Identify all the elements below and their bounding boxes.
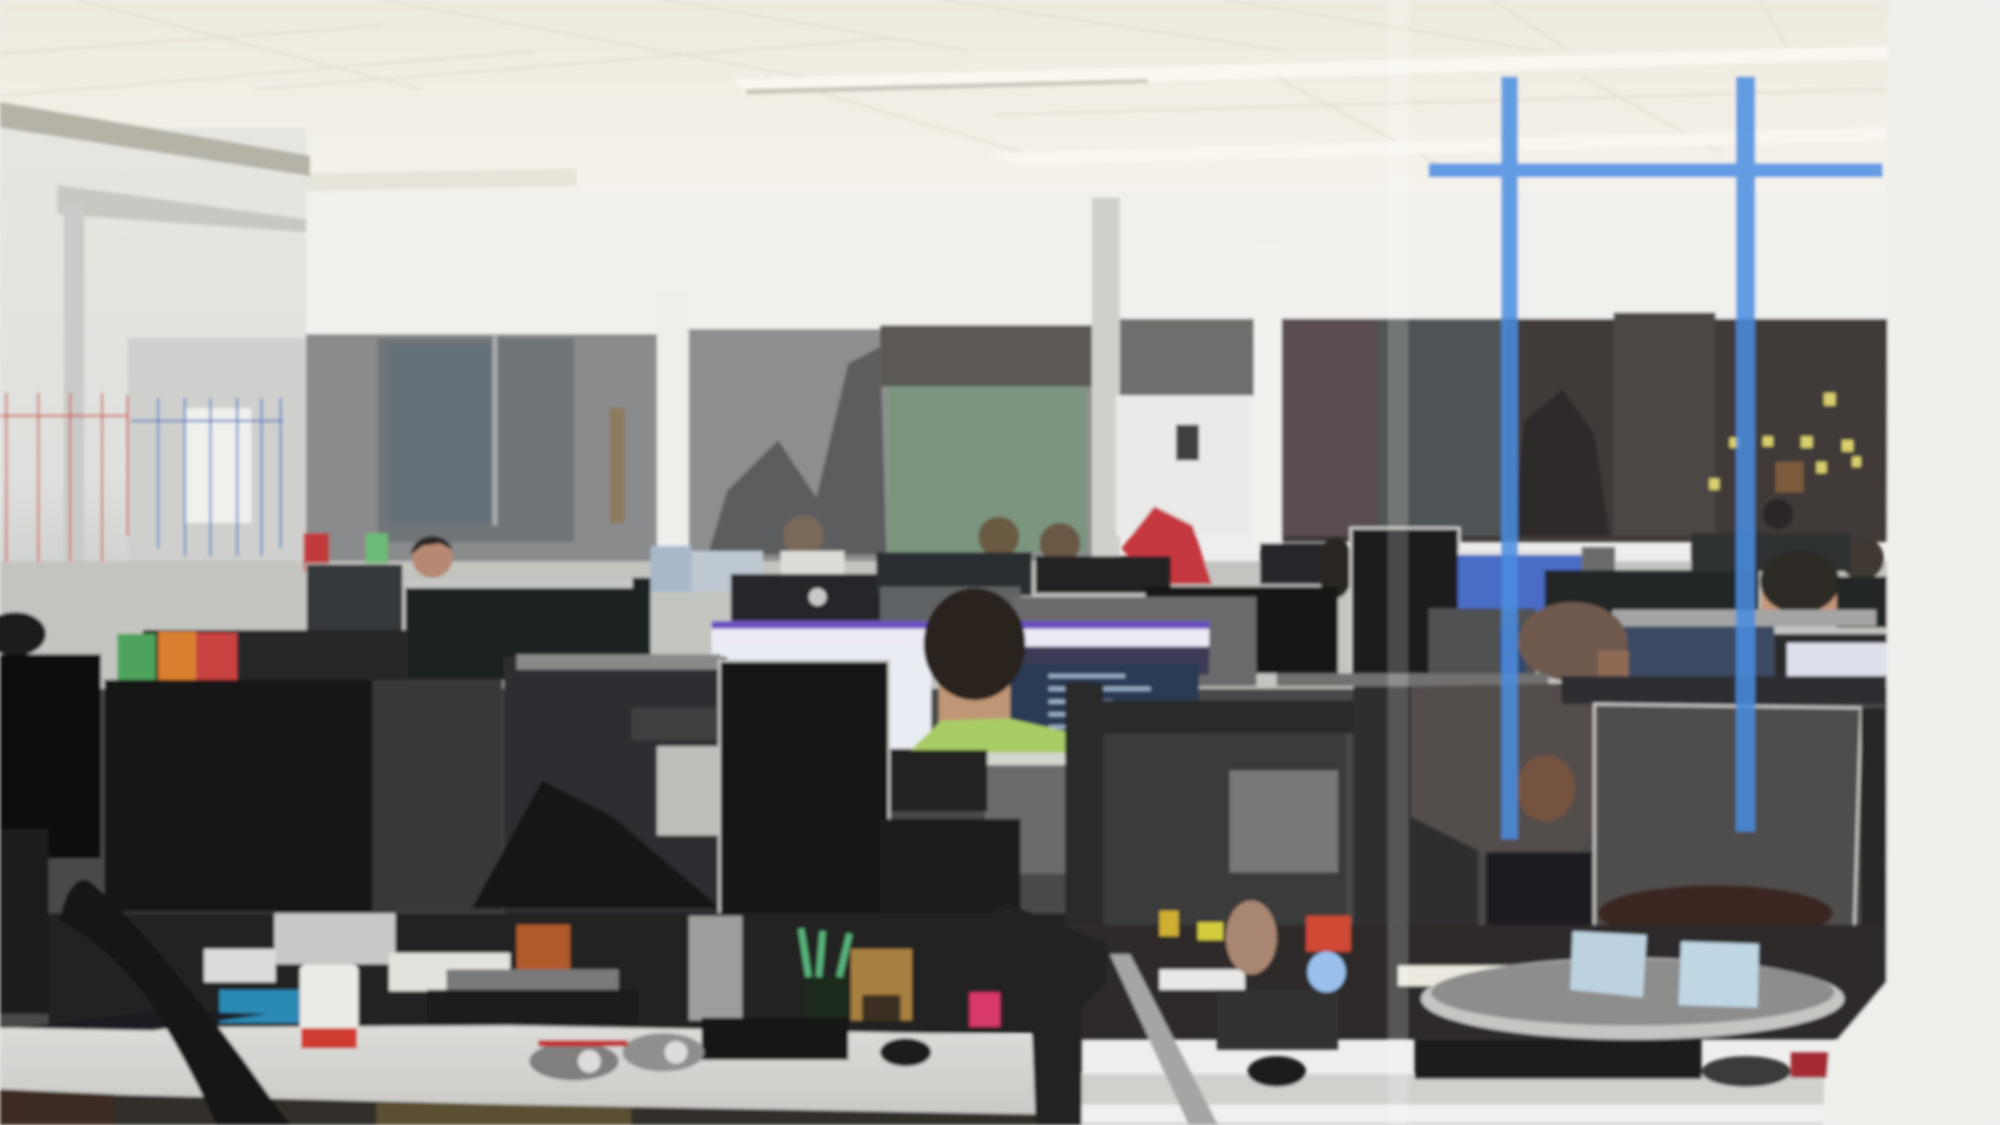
ceiling <box>0 0 2000 210</box>
red and green tabs on far monitor <box>304 533 388 571</box>
laptop <box>19 1010 268 1031</box>
desk clutter band right <box>1065 901 1888 1050</box>
glass pane reflection stripe <box>1388 0 1408 1125</box>
right white wall edge <box>1823 0 2000 1125</box>
round table <box>1421 958 1844 1040</box>
pillar and window frame <box>1092 198 1120 561</box>
second right mouse <box>1702 1056 1791 1087</box>
office chair behind centre <box>880 750 1020 1023</box>
back dark glass panel right <box>1282 312 1888 542</box>
right black mouse <box>1247 1056 1306 1087</box>
silver computer mice <box>529 1033 704 1080</box>
large foreground monitor centre <box>719 661 889 920</box>
yellow sticky notes <box>1709 393 1861 490</box>
left room header beam <box>0 102 310 176</box>
back wall <box>304 191 1888 338</box>
black mouse <box>880 1038 931 1066</box>
desk objects <box>19 964 1835 1087</box>
seated man in green shirt <box>911 588 1069 874</box>
background heads <box>411 499 1884 584</box>
back dark glass panel centre with window <box>689 325 1092 561</box>
mid right desk area <box>1065 673 1548 931</box>
centre bright screen <box>712 621 1209 749</box>
foreground office chair right <box>976 903 1107 1125</box>
whiteboard blue chart lines <box>131 398 283 556</box>
blue sticky notes <box>1570 931 1759 1008</box>
round table top <box>1431 959 1834 1026</box>
right keyboard <box>1415 1040 1702 1079</box>
far-left foreground monitor <box>0 654 101 858</box>
foreground desk right <box>1082 1074 1824 1125</box>
floor strip <box>0 1089 1065 1125</box>
far monitors row <box>306 528 1889 686</box>
far-left head <box>0 612 46 656</box>
seated man torso with crossed arms <box>1411 682 1625 935</box>
whiteboard red chart lines <box>0 393 128 574</box>
far-left monitor with coloured tabs <box>117 630 406 696</box>
near left monitor base <box>0 829 48 1014</box>
keyboard base <box>702 1018 848 1060</box>
back dark glass panel left <box>306 334 658 564</box>
foreground office chair left <box>60 880 291 1125</box>
red item <box>1791 1052 1835 1078</box>
blue cross marks on the glass <box>1429 77 1883 839</box>
white pillar <box>657 293 689 548</box>
central glass reflection block <box>504 654 727 918</box>
desk clutter band left <box>48 913 1065 1033</box>
back panel right of pillar <box>1116 242 1282 548</box>
pink object <box>969 992 1000 1027</box>
mid-floor desks <box>0 561 1888 702</box>
man seated at right, head and shirt <box>1518 602 1629 681</box>
left glass room <box>0 128 306 631</box>
large foreground monitor left <box>105 680 721 912</box>
white and red cup <box>300 964 358 1048</box>
lower floor darkness <box>0 689 1888 1033</box>
right foreground monitor <box>1561 676 1886 976</box>
grey chair arm diagonal <box>1110 954 1218 1125</box>
ceiling light strips <box>302 46 1888 191</box>
foreground desk <box>0 1026 1065 1115</box>
